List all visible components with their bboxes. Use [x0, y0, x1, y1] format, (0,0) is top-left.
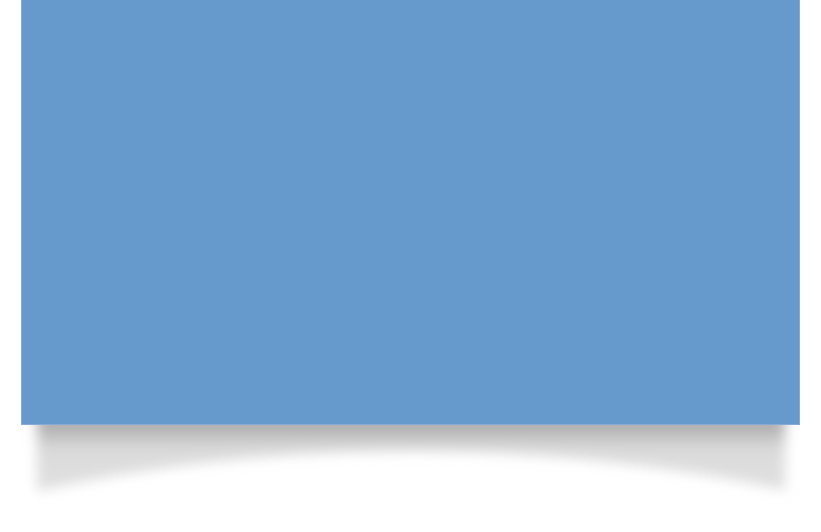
blue panel [22, 0, 800, 424]
curved drop shadow [37, 412, 785, 491]
